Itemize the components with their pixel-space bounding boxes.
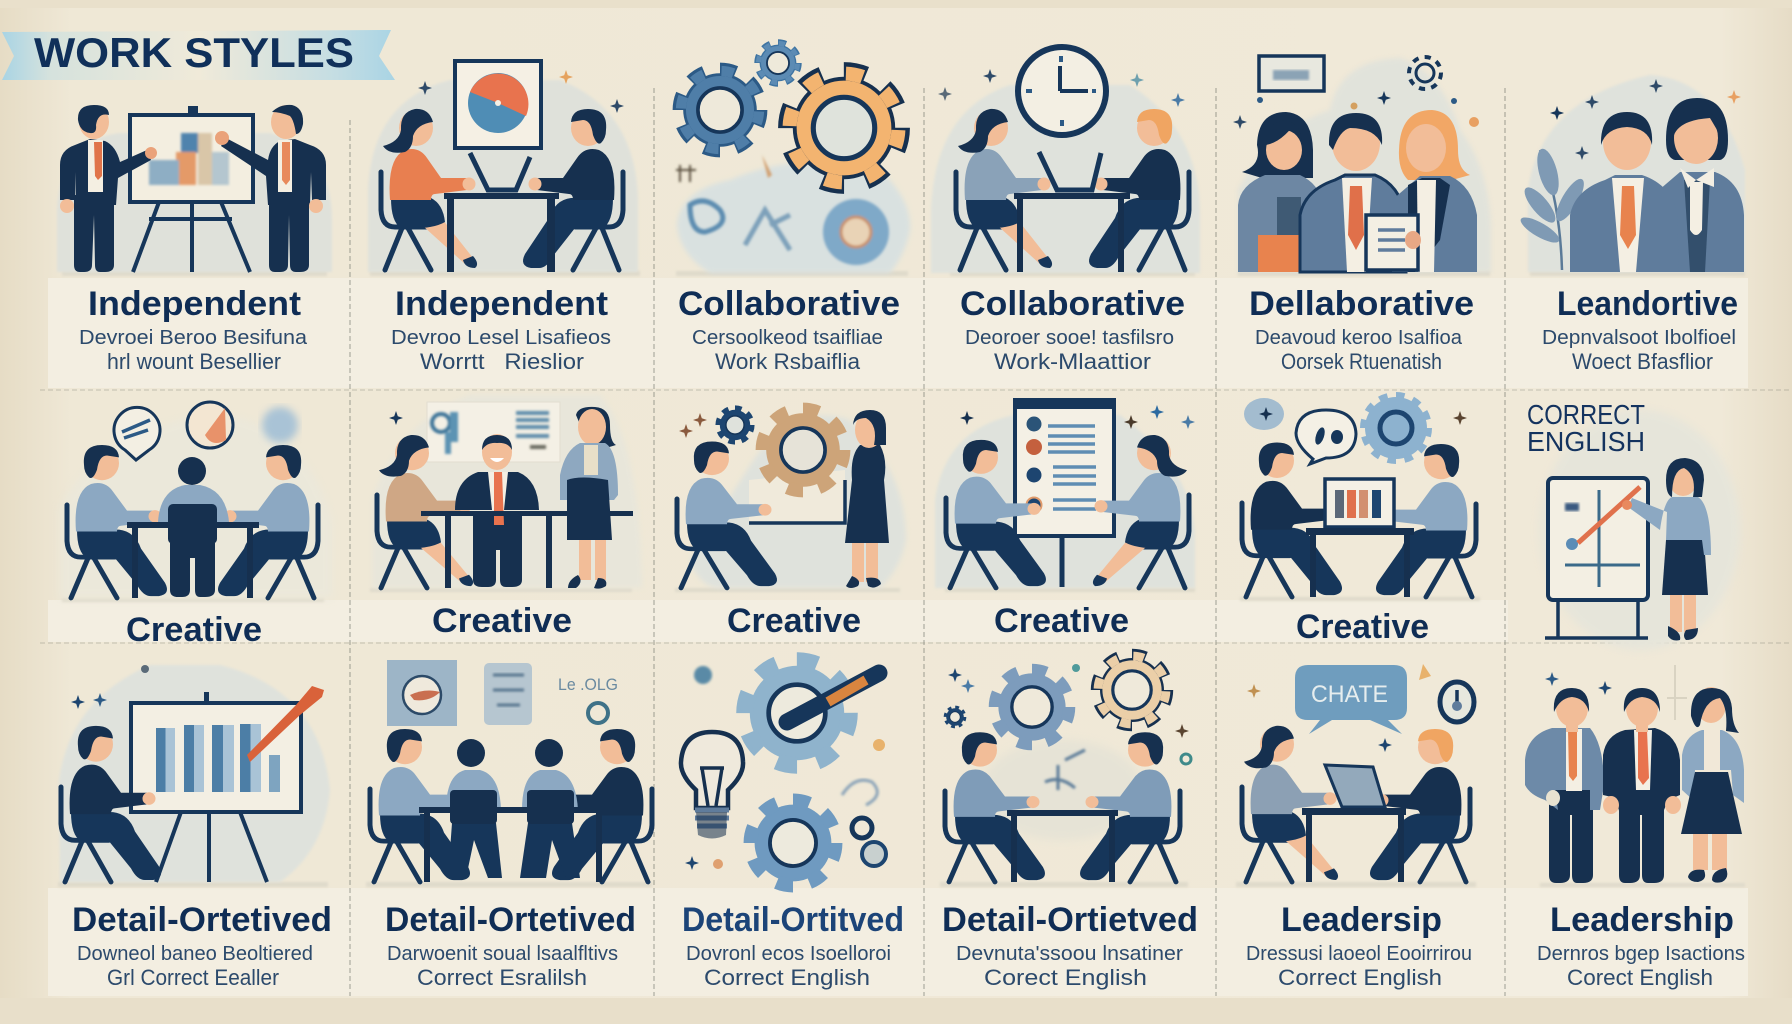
small star [389,411,403,425]
description: Dernros bgep Isactions [1537,943,1745,965]
table [419,807,606,882]
pointer tool [787,673,879,722]
standing woman [845,410,889,588]
clipboard [1366,215,1421,270]
title: Leandortive: Leandortive [1557,285,1738,323]
panel: three colleagues [1233,56,1491,374]
laptop with bars [1325,479,1394,527]
description [77,943,313,990]
easel bar chart [131,692,301,882]
panel: detail-oriented, gears over table [942,655,1198,990]
small decorations [948,664,1191,764]
seated woman [956,109,1052,270]
small decorations [1233,91,1479,129]
list board [1014,398,1115,587]
seated man pointing [61,726,161,882]
standing woman [560,407,618,589]
description: Deoroer sooe! tasfilsro [965,327,1174,349]
title: Creative: Creative [1296,608,1429,646]
seated man right [218,445,318,598]
title banner: WORK STYLES [34,29,354,76]
seated man orange hair [1370,729,1470,882]
seated man blue-grey [1376,444,1476,597]
small stars [679,413,707,438]
right presenter [215,105,326,272]
description: Corect English [1567,965,1713,990]
chat bubble: CHATE [1311,681,1388,708]
description: Deavoud keroo Isalfioa [1255,327,1463,349]
panel: detail-oriented, meeting of four [370,660,652,990]
easel board with chart [130,106,253,272]
title: Detail-Ortitved: Detail-Ortitved [682,901,904,939]
panel: creative, long table [372,395,642,640]
table [1014,193,1130,272]
panel: creative, list board [935,398,1195,640]
panel: correct english [1527,399,1740,650]
panel: creative, round table [60,402,332,649]
seated woman [1093,435,1189,588]
table [1007,810,1118,882]
blue gear [680,70,760,150]
panel: independent, two at a table [368,61,638,374]
panel: leadership, three standing [1525,665,1745,990]
panel: creative, gear and presenter [677,408,906,640]
small decorations [685,666,886,870]
title: Detail-Ortietved: Detail-Ortietved [942,901,1198,939]
title: Independent: Independent [395,285,608,323]
title: Creative: Creative [727,602,861,640]
description [692,327,883,374]
laptop [1325,765,1385,807]
description: Correct Esralilsh [417,965,587,990]
whiteboard [1545,478,1648,638]
small navy gear [945,707,965,727]
description: Work-Mlaattior [994,349,1151,374]
description: Oorsek Rtuenatish [1281,349,1442,374]
woman, orange hair [1392,110,1477,272]
man with tie [1300,113,1406,272]
orange gear [788,72,900,184]
seated woman, orange top [381,109,477,270]
plant [1517,146,1589,270]
panel: detail-oriented, bar chart presenter [59,665,332,990]
small decorations [1550,79,1741,160]
man with orange tie [1570,112,1679,272]
title: Detail-Ortetived: Detail-Ortetived [385,901,636,939]
description: Cersoolkeod tsaifliae [692,327,883,349]
speech bubble icon [114,407,160,460]
light bulb [681,732,743,838]
tan gear [1097,655,1167,725]
blue blob icon [1244,398,1284,430]
power icon [1440,682,1474,722]
orange pointer [247,686,324,762]
seated woman [377,435,473,588]
title: Leadersip: Leadersip [1281,901,1442,939]
seated man navy [1242,442,1342,597]
description [387,943,618,990]
description: Worrtt Rieslior [420,349,584,374]
seated woman [1242,726,1338,882]
person from behind [446,739,502,878]
lower gear [751,801,835,885]
heading: correct english [1527,399,1645,457]
table [1302,808,1406,882]
seated man [677,441,777,588]
description: Grl Correct Eealler [107,965,279,990]
title: Independent: Independent [88,285,301,323]
pie chart frame [455,61,541,148]
table [1306,528,1414,597]
man in grey-blue jacket [1525,688,1604,883]
table [444,193,559,272]
heading: correct english: CORRECT [1527,399,1645,430]
woman, navy hair [1238,112,1320,272]
small navy gear [718,408,752,442]
panel: creative, laptop and speech bubble [1242,395,1476,646]
virus icon [1409,57,1441,89]
description: Depnvalsoot Ibolfioel [1542,327,1736,349]
description: hrl wount Besellier [107,349,281,374]
small stars [418,70,624,113]
small stars [938,69,1185,107]
man in navy suit [1603,688,1681,883]
description [1542,327,1736,374]
wall pictures [387,660,618,726]
wall frame [1259,56,1324,91]
seated man [946,440,1046,588]
small decorations [1545,665,1687,720]
description: Correct English [1278,965,1442,990]
blue gear [995,670,1069,744]
description [956,943,1183,990]
woman with white tie [1659,98,1744,272]
title: Collaborative: Collaborative [960,285,1185,323]
description: Devnuta'ssoou lnsatiner [956,943,1183,965]
long table [421,511,633,588]
description: Dovronl ecos Isoelloroi [686,943,891,965]
wall clock [1018,47,1106,135]
wall pictures: Le .OLG [558,675,618,694]
person from behind [520,739,580,878]
laptop [1039,152,1101,190]
seated man right [1080,732,1180,882]
description [1255,327,1463,374]
panel: leaders pair [1517,75,1745,374]
description [965,327,1174,374]
description: Downeol baneo Beoltiered [77,943,313,965]
title: Dellaborative: Dellaborative [1249,285,1474,323]
table [127,522,259,598]
seated man, navy top [523,109,623,270]
chat bubble [1295,665,1407,734]
description [79,327,308,374]
description: Corect English [984,965,1147,990]
blue gear [1363,395,1429,461]
wall chart [427,402,560,462]
seated man left [945,732,1045,882]
title: Creative: Creative [994,602,1129,640]
small icons [71,665,149,709]
small star [1453,411,1467,425]
description [391,327,611,374]
woman in cardigan and skirt [1681,687,1744,883]
left presenter [60,105,157,272]
doodle above table [1045,750,1085,790]
title: Creative: Creative [432,602,572,640]
description: Woect Bfasflior [1572,349,1713,374]
small decorations [1247,664,1431,752]
description: Correct English [704,965,870,990]
speech bubble [1296,410,1356,464]
blurred doodles [676,155,889,265]
description: Work Rsbaiflia [715,349,861,374]
title: Creative: Creative [126,611,262,649]
seated man facing viewer [455,434,539,587]
description: Devroei Beroo Besifuna [79,327,308,349]
title: Detail-Ortetived: Detail-Ortetived [72,901,332,939]
small blue gear [758,43,798,83]
person seen from behind [158,457,229,597]
panel: detail-oriented, ideas [681,661,904,990]
title: Collaborative: Collaborative [678,285,900,323]
seated man, orange hair [1089,109,1189,270]
description: Darwoenit soual lsaalfltivs [387,943,618,965]
heading: correct english: ENGLISH [1527,426,1645,457]
blue smudge [262,407,298,443]
panel: collaborative, gears [676,43,910,374]
panel: independent, presenters at easel [57,105,332,374]
seated man right [552,729,652,882]
large gear [745,661,849,765]
description [1537,943,1745,990]
tan gear [763,410,843,490]
presenting woman [1622,458,1711,640]
seated man left [370,729,470,882]
description: Devroo Lesel Lisafieos [391,327,611,349]
description: Dressusi laoeol Eooirrirou [1246,943,1472,965]
description [686,943,891,990]
laptop [470,153,530,190]
title: Leadership: Leadership [1550,901,1734,939]
panel: collaborative, clock and table [931,47,1200,374]
seated man left [67,445,167,598]
round thumbnail icon [187,402,233,448]
panel: leadership, chat [1242,664,1474,990]
white board [749,470,845,523]
description [1246,943,1472,990]
small stars [960,405,1195,429]
